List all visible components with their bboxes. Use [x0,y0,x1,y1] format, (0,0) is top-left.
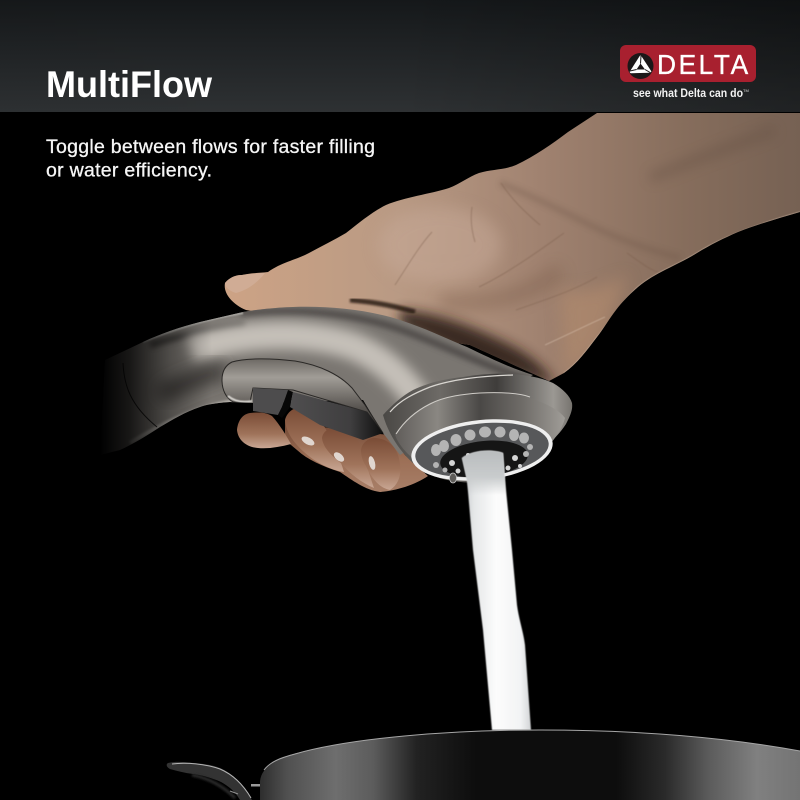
upper hand and wrist [225,113,800,385]
lower fingers [237,408,428,492]
water stream [462,451,531,730]
logo tagline: see what Delta can do [633,88,743,100]
first finger [237,412,291,448]
hand silhouette below faucet [285,420,428,492]
fourth finger [361,438,400,490]
pot handle rivet [251,784,261,786]
inner head band [395,393,565,477]
logo emblem [628,53,654,79]
outer head band [383,374,572,483]
third finger [322,428,374,488]
logo badge [620,45,756,82]
second finger [285,408,344,472]
inner face glints [449,453,522,474]
thumb contact shadow [350,300,415,312]
spray nozzles [431,426,533,472]
logo wordmark: DELTA [657,48,749,80]
palm shadow above faucet [400,310,555,385]
water drop [450,473,456,483]
trigger lower gleam [228,396,252,402]
right button [290,392,383,440]
title: MultiFlow [46,63,213,105]
trademark mark: TM [743,88,749,93]
fingernail highlights [300,435,377,471]
pot body [260,730,800,800]
spray head [383,374,572,487]
left button [253,388,288,415]
header band [0,0,800,112]
left fade of faucet hose [85,320,215,465]
pull-down faucet body [100,307,533,455]
description text: or water efficiency. [46,160,212,182]
description text: Toggle between flows for faster filling [46,136,375,158]
Delta logo [620,45,756,100]
inner black ring [438,436,530,482]
description text [46,136,375,182]
pot handle [167,762,252,800]
grey top of stream [462,451,506,495]
white spray-face ring [408,413,556,487]
trigger recess [222,359,383,433]
cooking pot [167,730,800,800]
button gap [278,390,293,418]
toggle buttons [253,388,383,440]
thumb nail [225,273,265,293]
spray face [413,417,551,483]
pot rim highlight [264,730,800,770]
